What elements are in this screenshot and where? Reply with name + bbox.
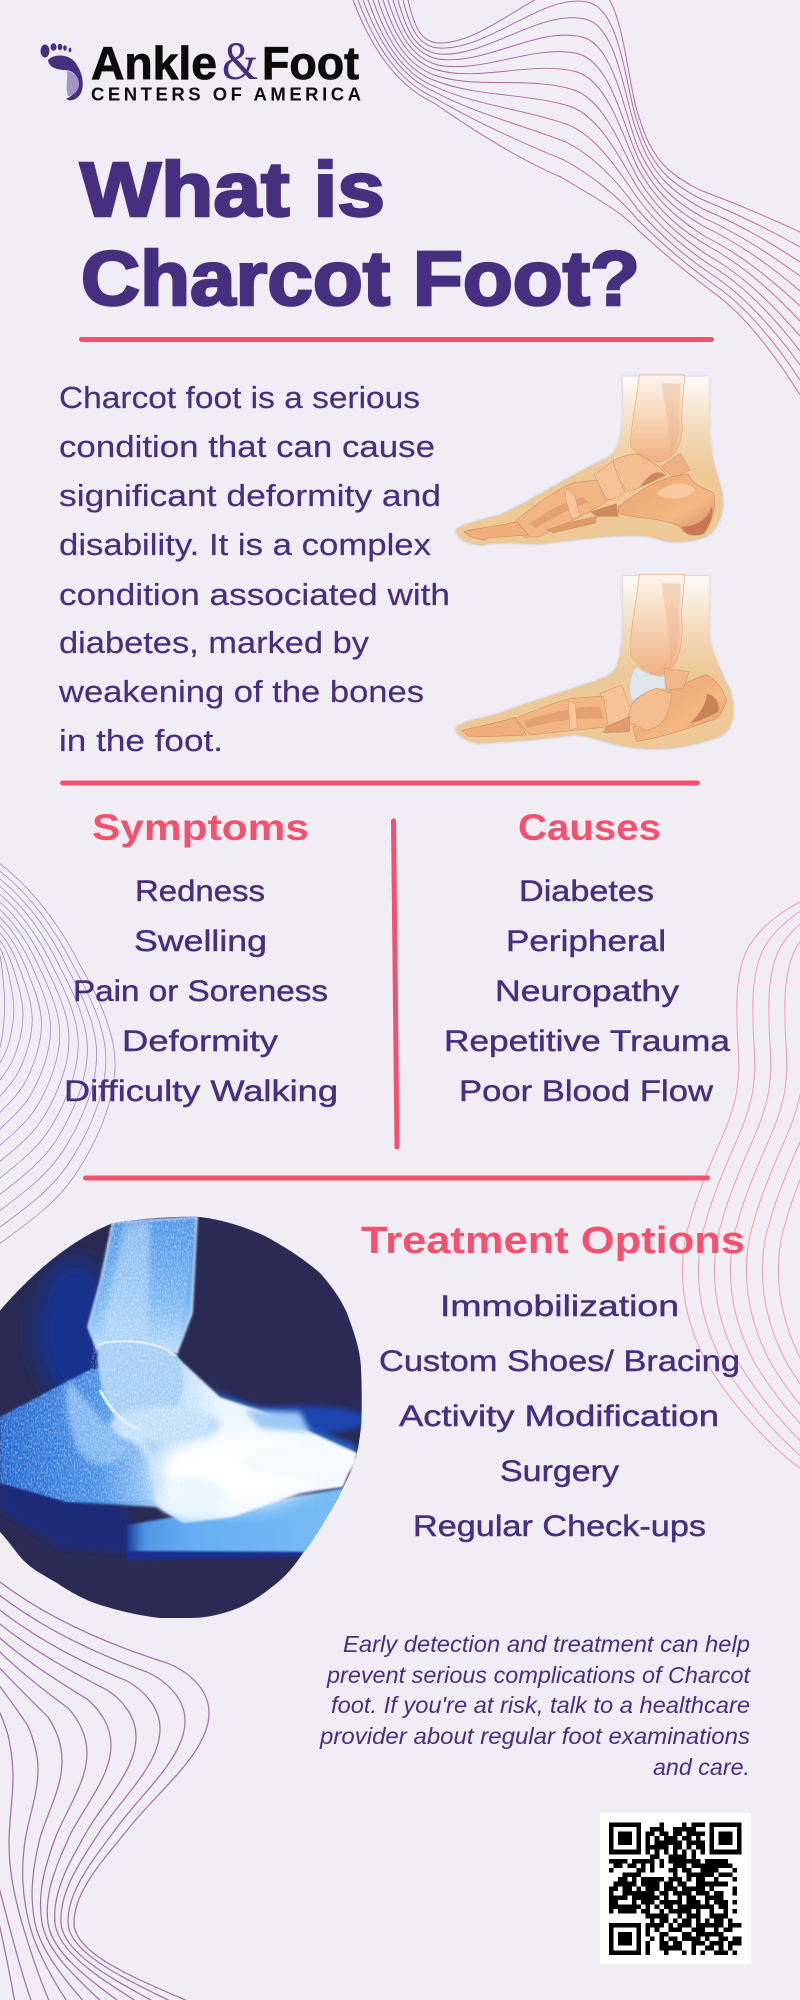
- intro paragraph: Charcot foot is a serious: [59, 380, 420, 415]
- decorative wave: top right: [353, 0, 800, 395]
- closing note: [319, 1631, 752, 1780]
- closing note: and care.: [653, 1754, 750, 1780]
- QR code: [600, 1813, 751, 1964]
- decorative wave: left nested curves: [0, 860, 115, 1247]
- logo: Ankle & Foot Centers of America: [40, 31, 361, 104]
- decorative wave: right pink curves: [682, 898, 800, 1475]
- list: treatment options: Regular Check-ups: [413, 1510, 706, 1543]
- heading: causes: Causes: [518, 807, 661, 848]
- list: symptoms: Redness: [135, 875, 265, 908]
- divider under title: [79, 337, 714, 342]
- decorative wave: bottom left: [0, 1582, 209, 2000]
- closing note: prevent serious complications of Charcot: [326, 1662, 752, 1688]
- intro paragraph: weakening of the bones: [58, 674, 424, 709]
- wordmark: Foot: Foot: [262, 37, 359, 89]
- closing note: foot. If you're at risk, talk to a healthcare: [331, 1692, 750, 1718]
- list: symptoms: Difficulty Walking: [64, 1075, 338, 1108]
- wordmark: ampersand: &: [222, 31, 258, 91]
- list: symptoms: Pain or Soreness: [73, 975, 328, 1008]
- list: causes: [444, 875, 730, 1108]
- intro paragraph: condition associated with: [59, 577, 450, 612]
- wordmark: Ankle: Ankle: [91, 37, 217, 89]
- divider above treatment: [83, 1176, 710, 1180]
- list: causes: Repetitive Trauma: [444, 1025, 730, 1058]
- title: [80, 147, 640, 322]
- closing note: provider about regular foot examinations: [319, 1723, 751, 1749]
- list: treatment options: [379, 1290, 740, 1543]
- list: symptoms: Swelling: [134, 925, 267, 958]
- list: symptoms: [64, 875, 338, 1108]
- list: treatment options: Immobilization: [440, 1290, 679, 1323]
- intro paragraph: diabetes, marked by: [59, 625, 370, 660]
- divider above symptoms and causes: [60, 780, 700, 786]
- list: symptoms: Deformity: [122, 1025, 278, 1058]
- panel: symptoms: [64, 807, 338, 1108]
- intro paragraph: in the foot.: [59, 723, 223, 758]
- heading: treatment options: Treatment Options: [361, 1220, 745, 1262]
- title: Charcot Foot?: [81, 236, 640, 322]
- heading: symptoms: Symptoms: [92, 807, 309, 848]
- list: causes: Poor Blood Flow: [459, 1075, 713, 1108]
- icon: footprint: [40, 43, 83, 100]
- intro paragraph: significant deformity and: [59, 478, 441, 513]
- panel: treatment options: [361, 1220, 745, 1543]
- illustration: healthy foot anatomy: [456, 375, 723, 545]
- intro paragraph: disability. It is a complex: [59, 527, 432, 562]
- list: causes: Peripheral: [506, 925, 666, 958]
- illustration: Charcot foot anatomy: [456, 574, 733, 749]
- list: causes: Diabetes: [519, 875, 654, 908]
- list: treatment options: Custom Shoes/ Bracing: [379, 1345, 740, 1378]
- panel: causes: [444, 807, 730, 1108]
- intro paragraph: [58, 380, 450, 758]
- closing note: Early detection and treatment can help: [343, 1631, 750, 1657]
- wordmark: Centers of America: CENTERS OF AMERICA: [91, 84, 361, 104]
- vertical divider: [394, 821, 397, 1147]
- image: foot x-ray in organic blob: [0, 1210, 370, 1625]
- list: treatment options: Surgery: [500, 1455, 619, 1488]
- intro paragraph: condition that can cause: [59, 429, 435, 464]
- list: treatment options: Activity Modification: [399, 1400, 719, 1433]
- title: What is: [80, 147, 385, 233]
- list: causes: Neuropathy: [495, 975, 679, 1008]
